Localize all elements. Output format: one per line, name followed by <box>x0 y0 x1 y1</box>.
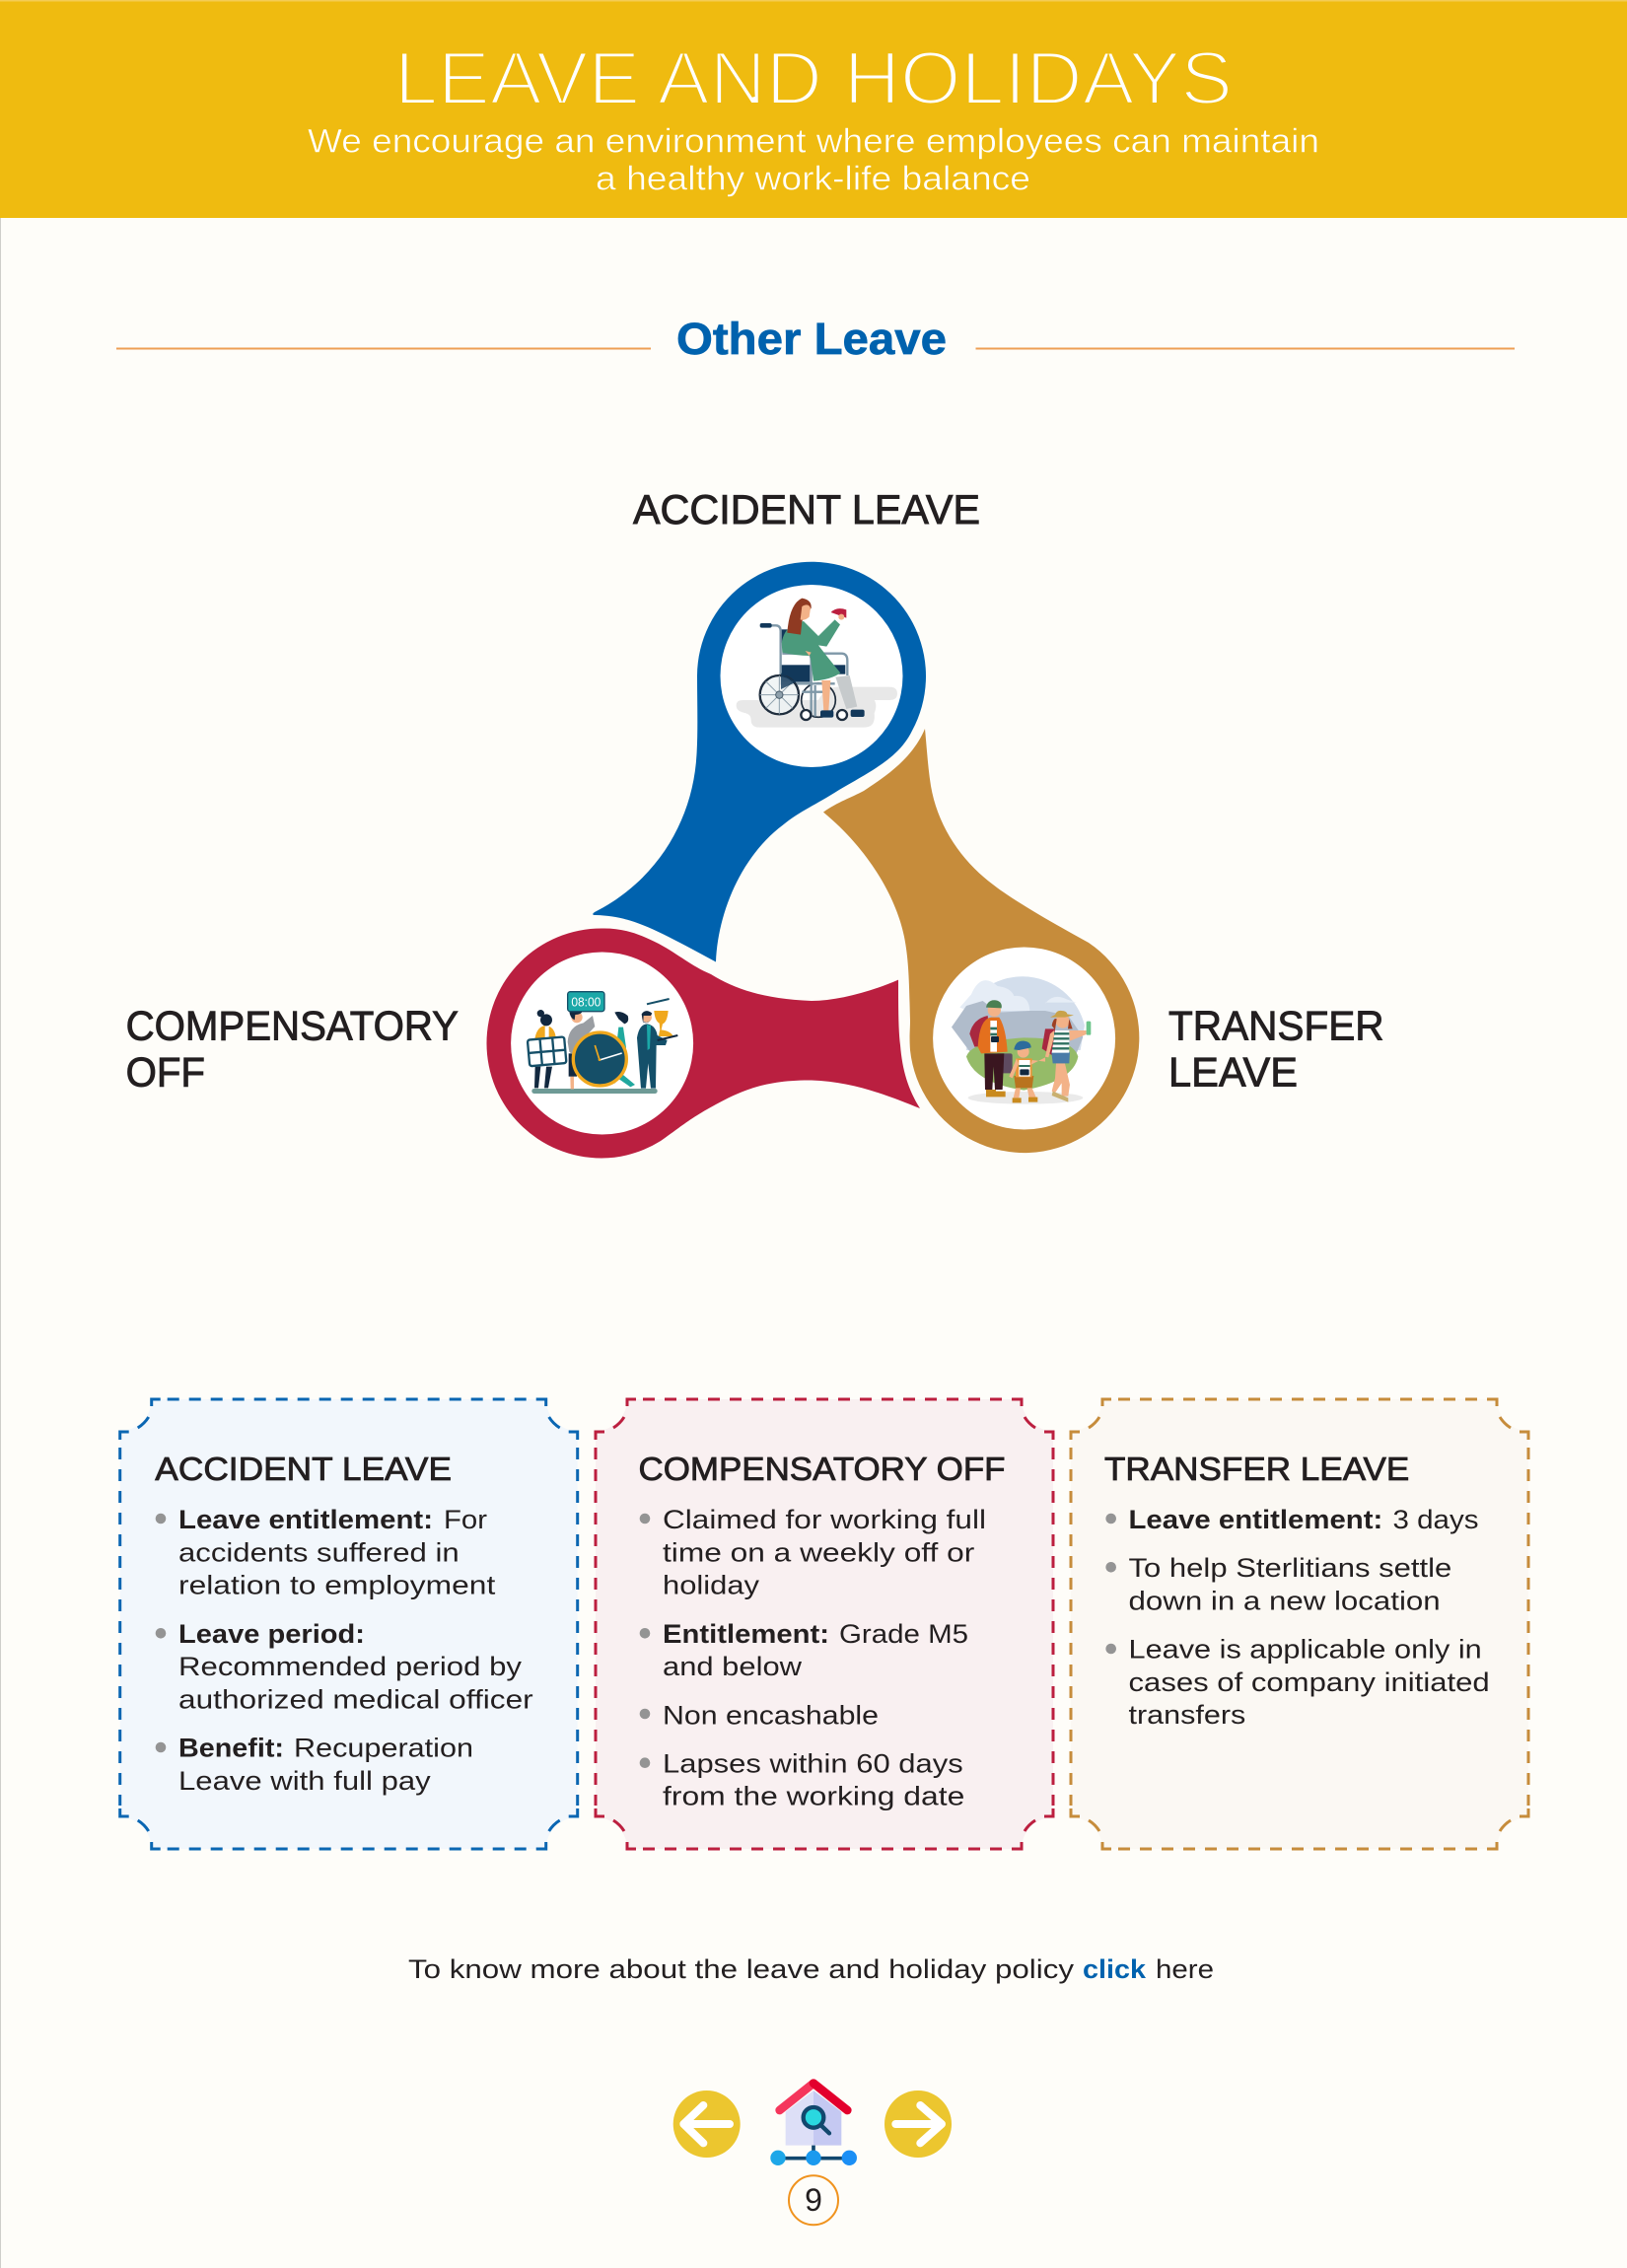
bullet list: 3 days <box>1392 1505 1479 1534</box>
label: compensatory off: COMPENSATORY <box>126 1002 459 1049</box>
bullet list: Leave with full pay <box>178 1766 432 1796</box>
card: accident leave <box>120 1399 578 1849</box>
label: compensatory off <box>126 1002 459 1095</box>
bullet list: Recuperation <box>294 1733 473 1762</box>
title: LEAVE AND HOLIDAYS <box>394 36 1233 120</box>
label: transfer leave: LEAVE <box>1168 1049 1298 1095</box>
bullet list: Leave entitlement: <box>178 1505 433 1534</box>
bullet list: Benefit: <box>178 1733 284 1762</box>
card: transfer leave <box>1071 1399 1528 1849</box>
bullet list: relation to employment <box>178 1571 496 1600</box>
icon disc: compensatory off <box>511 953 693 1134</box>
label: compensatory off: OFF <box>126 1049 205 1095</box>
icon: woman in wheelchair <box>737 599 897 728</box>
label: transfer leave: TRANSFER <box>1168 1002 1384 1049</box>
icon disc: accident leave <box>720 585 903 767</box>
pin: transfer leave (gold) <box>823 729 1139 1153</box>
card frame <box>1071 1399 1528 1849</box>
icon disc: transfer leave <box>933 947 1115 1130</box>
icon: previous arrow <box>673 2091 741 2158</box>
bullet list: Leave entitlement: <box>1128 1505 1382 1534</box>
card heading: TRANSFER LEAVE <box>1104 1451 1409 1487</box>
bullet list: Non encashable <box>663 1700 879 1730</box>
bullet list <box>1105 1505 1490 1730</box>
card heading: ACCIDENT LEAVE <box>155 1451 452 1487</box>
section heading: Other Leave: Other Leave <box>676 314 947 364</box>
bullet list: Leave is applicable only in <box>1128 1635 1482 1665</box>
policy link sentence: click <box>1083 1954 1146 1984</box>
policy link sentence: To know more about the leave and holiday policy <box>408 1954 1075 1984</box>
bullet list: Leave period: <box>178 1619 365 1649</box>
bullet list: Recommended period by <box>178 1652 523 1681</box>
pin: compensatory off (crimson) <box>487 928 920 1158</box>
bullet list: Grade M5 <box>839 1619 968 1649</box>
subtitle <box>308 123 1319 198</box>
page number <box>789 2175 838 2225</box>
bullet list: cases of company initiated <box>1128 1667 1490 1697</box>
bullet list: and below <box>663 1652 803 1681</box>
page number: 9 <box>805 2182 822 2218</box>
header banner <box>0 0 1627 218</box>
card: compensatory off <box>596 1399 1053 1849</box>
diagram: three linked pins <box>487 562 1139 1158</box>
card frame <box>120 1399 578 1849</box>
bullet list: time on a weekly off or <box>663 1537 975 1567</box>
card frame <box>596 1399 1053 1849</box>
bullet list: transfers <box>1128 1700 1245 1730</box>
bullet list: down in a new location <box>1128 1586 1441 1615</box>
label: accident leave: ACCIDENT LEAVE <box>633 486 980 532</box>
bullet list: Entitlement: <box>663 1619 829 1649</box>
bullet list <box>640 1505 986 1811</box>
bullet list: authorized medical officer <box>178 1684 533 1714</box>
bullet list: To help Sterlitians settle <box>1128 1553 1451 1583</box>
icon: team with clock <box>528 992 677 1094</box>
policy link sentence: here <box>1156 1954 1214 1984</box>
icon: team with clock: 08:00 <box>571 996 601 1010</box>
bullet list <box>156 1505 533 1796</box>
bullet list: holiday <box>663 1571 760 1600</box>
bullet list: Claimed for working full <box>663 1505 986 1534</box>
icon: home search <box>770 2084 857 2165</box>
bullet list: from the working date <box>663 1782 964 1811</box>
card heading: COMPENSATORY OFF <box>639 1451 1006 1487</box>
bullet list: For <box>444 1505 487 1534</box>
subtitle: We encourage an environment where employees can maintain <box>308 123 1319 161</box>
pin: accident leave (blue) <box>593 562 926 962</box>
bullet list: accidents suffered in <box>178 1537 460 1567</box>
policy link sentence <box>408 1954 1214 1984</box>
subtitle: a healthy work-life balance <box>596 161 1030 198</box>
label: transfer leave <box>1168 1002 1384 1095</box>
icon: next arrow <box>884 2091 952 2158</box>
bullet list: Lapses within 60 days <box>663 1749 963 1779</box>
icon: family hiking <box>952 976 1091 1104</box>
